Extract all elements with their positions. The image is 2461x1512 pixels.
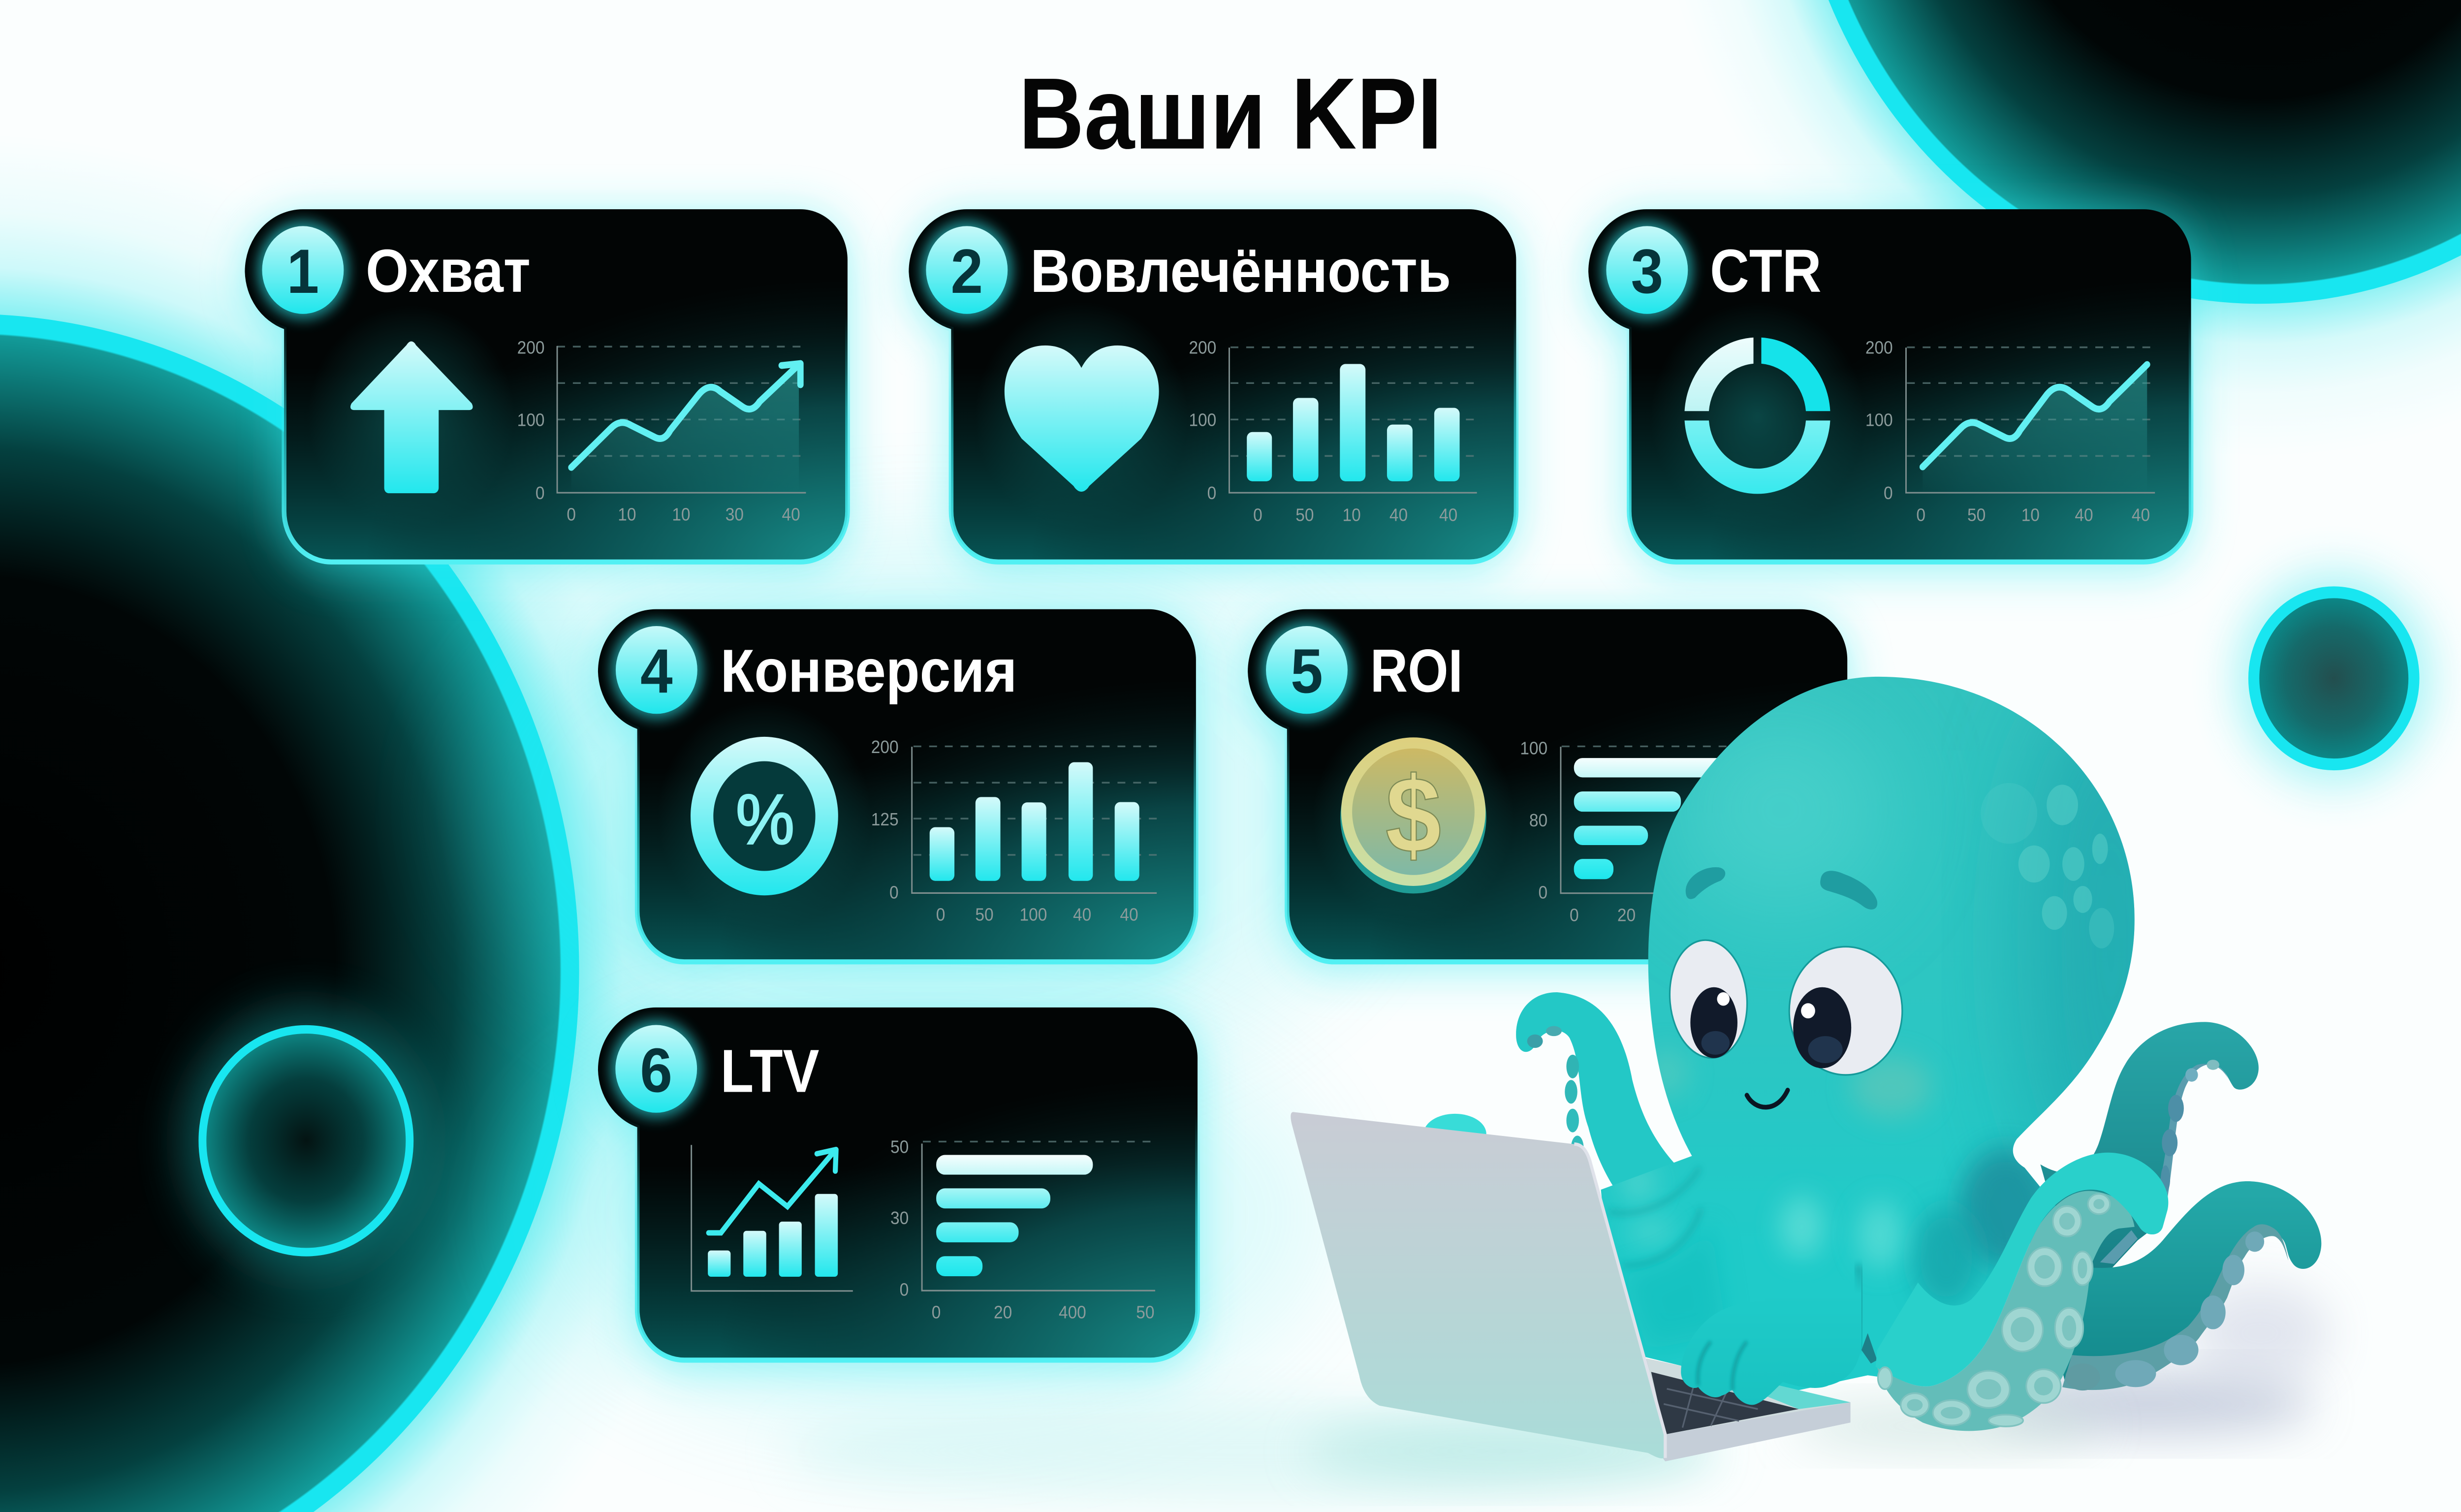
line chart: [517, 338, 806, 525]
horizontal bar chart: [890, 1138, 1155, 1323]
horizontal bar chart: 50: [1136, 1303, 1154, 1323]
line chart: 0: [1884, 484, 1893, 503]
bar chart: 40: [1389, 505, 1408, 525]
bar chart: 50: [975, 906, 994, 925]
heading: CTR: [1710, 237, 1822, 305]
horizontal bar chart: 400: [1059, 1303, 1086, 1323]
badge 2: [921, 221, 1012, 319]
lower right arm: [2040, 1181, 2321, 1390]
soft glows behind cards: [455, 523, 2431, 1502]
heading: LTV: [721, 1037, 820, 1105]
badge 4: [611, 621, 702, 719]
laptop: [1291, 1112, 1851, 1461]
small ring inside left circle: [181, 1006, 432, 1276]
line chart: [1865, 338, 2155, 525]
top right circle: [1829, 0, 2461, 304]
line chart: 10: [672, 505, 691, 525]
bar chart: 40: [1439, 505, 1457, 525]
heading: Охват: [366, 237, 531, 305]
line chart: 50: [1967, 505, 1986, 525]
panel: 3 CTR: [1588, 209, 2191, 568]
bar chart: 100: [1020, 906, 1047, 925]
horizontal bar chart: 20: [994, 1303, 1012, 1323]
heading: ROI: [1370, 637, 1463, 705]
badge 5: 5: [1291, 636, 1323, 706]
raised left arm: [1516, 992, 1703, 1218]
line chart: 0: [567, 505, 576, 525]
head spots: [1981, 783, 2114, 948]
eyebrows: [1686, 867, 1877, 910]
icon: coin: [1313, 709, 1514, 925]
line chart: 0: [1916, 505, 1925, 525]
bar chart: 0: [936, 906, 945, 925]
badge 3: 3: [1631, 236, 1663, 306]
line chart: 30: [726, 505, 744, 525]
front arm with suckers: [1862, 1153, 2168, 1431]
badge 1: 1: [287, 236, 319, 306]
horizontal bar chart: 0: [1570, 906, 1579, 925]
bar chart: 40: [1120, 906, 1138, 925]
hand on keyboard: [1681, 1257, 1862, 1405]
line chart: 100: [517, 411, 545, 430]
line chart: 10: [2021, 505, 2040, 525]
horizontal bar chart: 100: [1520, 739, 1547, 758]
panel: 6 LTV: [598, 1008, 1198, 1367]
bar chart: 50: [1295, 505, 1314, 525]
big left circle: [0, 315, 579, 1512]
line chart: 200: [1865, 338, 1893, 358]
horizontal bar chart: 0: [932, 1303, 941, 1323]
line chart: 10: [618, 505, 636, 525]
panel: 1 Охват: [245, 209, 848, 568]
panel: 5 ROI: [1248, 609, 1847, 969]
icon: percent ring: [658, 701, 871, 931]
icon: heart: [975, 302, 1188, 532]
horizontal bar chart: 30: [890, 1209, 909, 1228]
panel: 2 Вовлечённость: [909, 209, 1516, 568]
icon: donut: [1651, 302, 1864, 532]
badge 3: [1602, 221, 1693, 319]
right small circle: [2254, 592, 2414, 764]
horizontal bar chart: 20: [1617, 906, 1636, 925]
bar chart: 200: [1189, 338, 1216, 358]
floor shadows: [1303, 1283, 2331, 1481]
badge 6: [611, 1020, 702, 1118]
bar chart: 0: [889, 883, 899, 903]
bar chart: 100: [1189, 411, 1216, 430]
bar chart: 10: [1343, 505, 1361, 525]
bar chart: 40: [1073, 906, 1091, 925]
line chart: 40: [782, 505, 800, 525]
arm tip behind laptop: [1423, 1114, 1486, 1154]
horizontal bar chart: 0: [900, 1280, 909, 1300]
badge 1: [257, 221, 348, 319]
bar chart: [871, 738, 1157, 925]
bar chart: 0: [1207, 484, 1216, 503]
top right circle halo: [1646, 0, 2461, 457]
line chart: 100: [1865, 411, 1893, 430]
line chart: 200: [517, 338, 545, 358]
horizontal bar chart: [1520, 739, 1758, 925]
eyes: [1665, 936, 1902, 1075]
line chart: 40: [2132, 505, 2150, 525]
icon: percent ring: %: [736, 780, 794, 859]
panel: 4 Конверсия: [598, 609, 1196, 969]
mouth: [1747, 1090, 1788, 1107]
badge 5: [1261, 621, 1352, 719]
title: Ваши KPI: [1019, 57, 1442, 170]
bar chart: 125: [871, 810, 899, 830]
icon: up arrow: [308, 306, 515, 528]
bar chart: [1189, 338, 1477, 525]
icon: coin: $: [1386, 755, 1441, 875]
octopus character with laptop: [1291, 675, 2331, 1481]
left circle halo: [0, 133, 747, 1512]
heading: Конверсия: [721, 637, 1017, 705]
bar chart: 0: [1253, 505, 1262, 525]
badge 6: 6: [640, 1035, 672, 1105]
horizontal bar chart: 50: [890, 1138, 909, 1157]
horizontal bar chart: 0: [1539, 883, 1547, 903]
badge 2: 2: [950, 236, 983, 306]
back right arm: [2040, 1022, 2259, 1276]
line chart: 40: [2075, 505, 2093, 525]
line chart: 0: [536, 484, 545, 503]
head and body: [1601, 675, 2205, 1392]
bar chart: 200: [871, 738, 899, 757]
icon: growth chart: [692, 1145, 853, 1291]
badge 4: 4: [640, 636, 673, 706]
horizontal bar chart: 80: [1529, 811, 1547, 830]
heading: Вовлечённость: [1030, 237, 1451, 305]
